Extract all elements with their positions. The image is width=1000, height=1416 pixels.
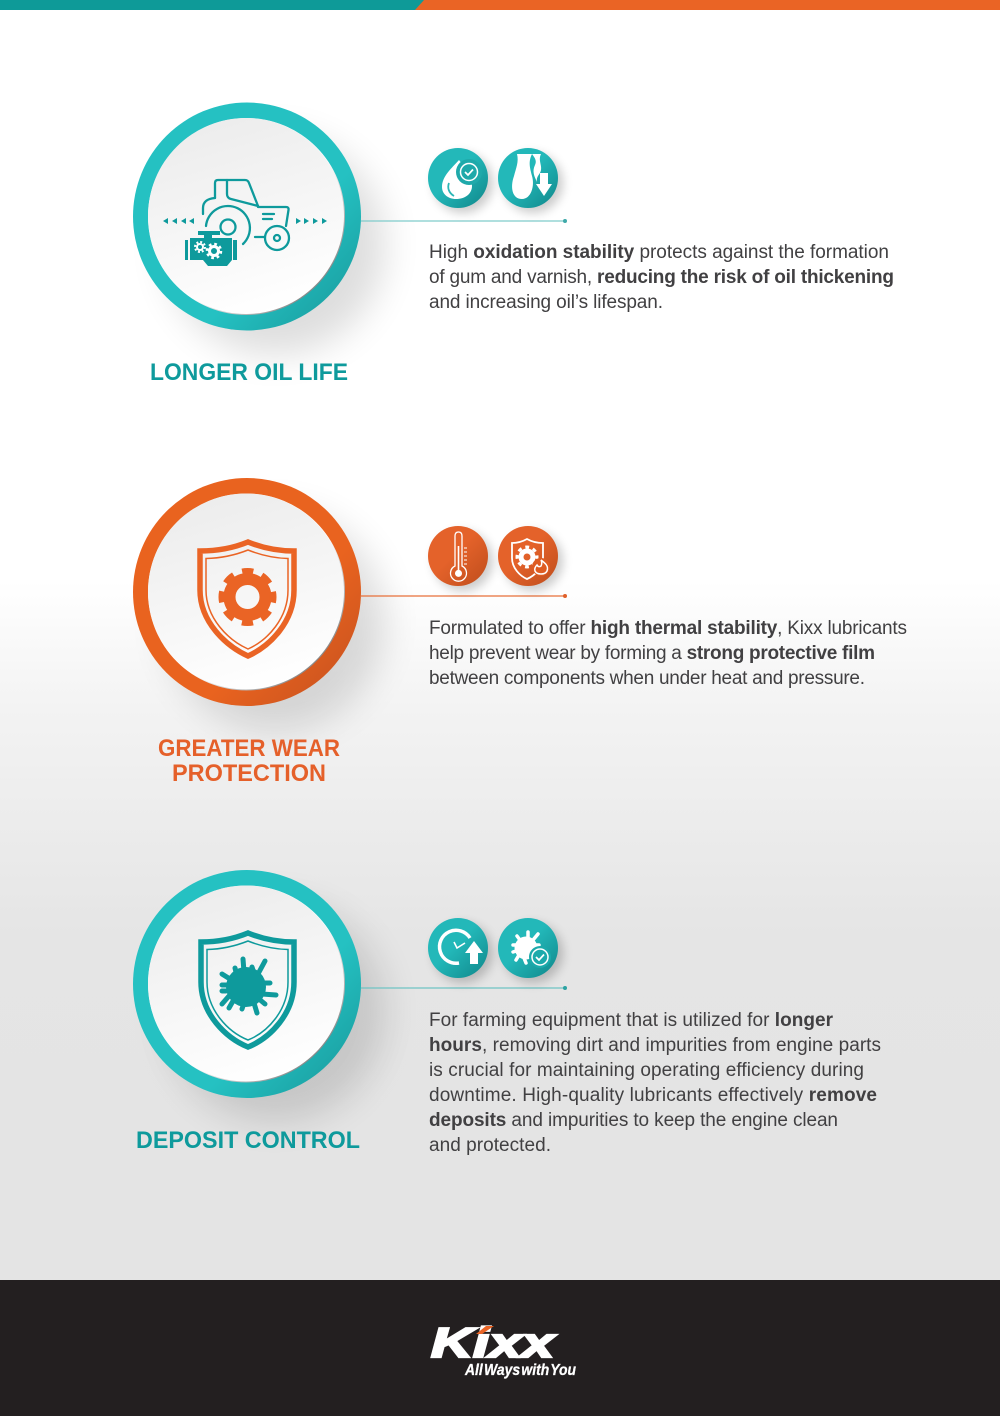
connector line bbox=[361, 986, 567, 990]
connector line bbox=[361, 594, 567, 598]
footer band bbox=[0, 1280, 1000, 1416]
text block: and protected. bbox=[429, 1135, 551, 1156]
text block: Formulated to offer high thermal stability, Kixx lubricants bbox=[429, 618, 907, 639]
text block: between components when under heat and pressure. bbox=[429, 668, 865, 689]
icon: deposit splat with check bbox=[498, 918, 563, 983]
text block: For farming equipment that is utilized for longer bbox=[429, 1010, 834, 1031]
heading bbox=[158, 735, 340, 787]
text block: and increasing oil’s lifespan. bbox=[429, 292, 663, 313]
text block bbox=[429, 242, 894, 313]
icon: shield with gear badge bbox=[133, 478, 385, 730]
text block: is crucial for maintaining operating efficiency during bbox=[429, 1060, 864, 1081]
logo: Kixx bbox=[431, 1319, 576, 1379]
text block: help prevent wear by forming a strong protective film bbox=[429, 643, 875, 664]
icon: tractor and engine badge bbox=[133, 102, 385, 355]
text block bbox=[429, 1010, 881, 1156]
heading: PROTECTION bbox=[172, 760, 326, 787]
text block: of gum and varnish, reducing the risk of oil thickening bbox=[429, 267, 894, 288]
text block: hours, removing dirt and impurities from engine parts bbox=[429, 1035, 881, 1056]
logo: Kixx: All Ways with You bbox=[464, 1362, 576, 1379]
panel: deposit control bbox=[133, 870, 881, 1156]
icon: viscosity down arrow bbox=[498, 148, 563, 213]
heading: DEPOSIT CONTROL bbox=[136, 1127, 360, 1154]
icon: shield gear with flame bbox=[498, 526, 563, 591]
logo: Kixx: Kixx bbox=[431, 1319, 556, 1366]
icon: oil drop with check bbox=[428, 148, 493, 213]
heading: GREATER WEAR bbox=[158, 735, 340, 762]
text block: High oxidation stability protects against the formation bbox=[429, 242, 889, 263]
text block: deposits and impurities to keep the engine clean bbox=[429, 1110, 838, 1131]
icon: thermometer bbox=[428, 526, 493, 591]
heading: LONGER OIL LIFE bbox=[150, 359, 348, 386]
text block bbox=[429, 618, 907, 689]
connector line bbox=[361, 219, 567, 223]
icon: clock with up arrow bbox=[428, 918, 493, 983]
panel: longer oil life bbox=[133, 102, 894, 386]
panel: greater wear protection bbox=[133, 478, 907, 787]
text block: downtime. High-quality lubricants effectively remove bbox=[429, 1085, 877, 1106]
icon: shield with deposit badge bbox=[133, 870, 385, 1122]
top colour bar bbox=[0, 0, 1000, 10]
